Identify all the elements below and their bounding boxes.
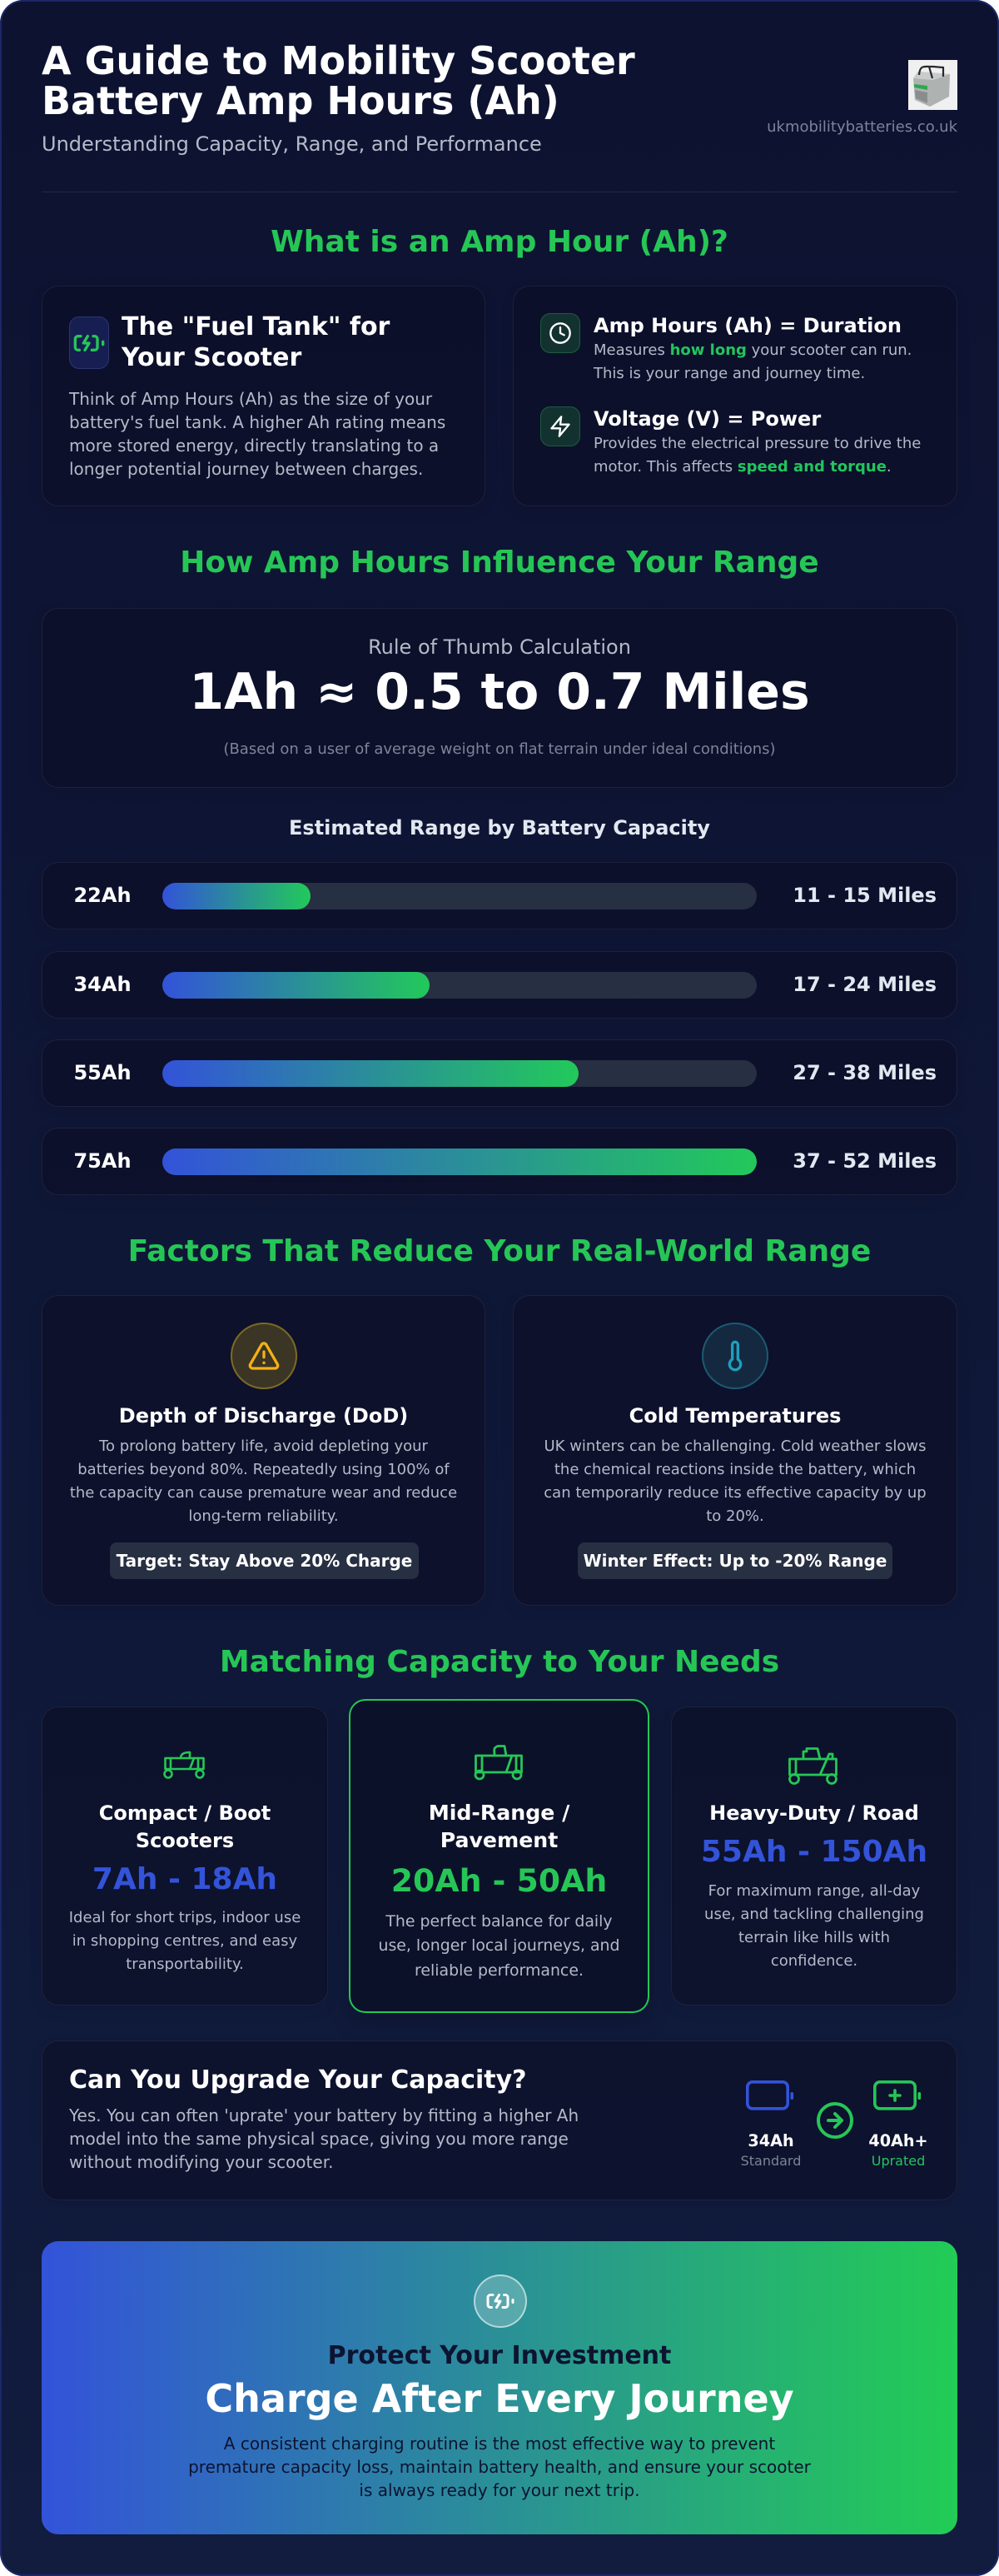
compact title: Scooters xyxy=(136,1829,234,1852)
fuel tank heading xyxy=(122,312,390,372)
rule value: 1Ah ≈ 0.5 to 0.7 Miles xyxy=(189,663,810,721)
panel: fuel tank xyxy=(42,286,485,506)
mid-range title: Pavement xyxy=(440,1828,558,1852)
upgrade text: model into the same physical space, giving you more range xyxy=(69,2129,569,2149)
upgrade text: Yes. You can often 'uprate' your battery by fitting a higher Ah xyxy=(69,2105,579,2125)
uprated label: Uprated xyxy=(872,2153,925,2169)
fuel tank text: more stored energy, directly translating to a xyxy=(69,436,439,456)
dod heading: Depth of Discharge (DoD) xyxy=(119,1404,408,1428)
row: 22Ah xyxy=(42,862,957,929)
row: 75Ah: 37 - 52 Miles xyxy=(793,1149,937,1173)
row: 22Ah: 11 - 15 Miles xyxy=(793,884,937,907)
amp hours heading: Amp Hours (Ah) = Duration xyxy=(594,314,902,337)
dod text: the capacity can cause premature wear and reduce xyxy=(70,1484,457,1502)
rule label: Rule of Thumb Calculation xyxy=(368,635,631,659)
subtitle: Understanding Capacity, Range, and Performance xyxy=(42,132,542,156)
range chart xyxy=(42,816,957,1195)
icon: compact scooter xyxy=(163,1751,205,1779)
dod text: batteries beyond 80%. Repeatedly using 100% of xyxy=(77,1461,450,1478)
fuel tank text: longer potential journey between charges. xyxy=(69,459,423,479)
fuel tank text xyxy=(68,389,445,479)
row: 55Ah xyxy=(42,1039,957,1107)
dod text: To prolong battery life, avoid depleting your xyxy=(99,1437,428,1455)
uprated value: 40Ah+ xyxy=(868,2131,928,2150)
cta text: is always ready for your next trip. xyxy=(359,2480,640,2500)
compact range: 7Ah - 18Ah xyxy=(92,1862,277,1896)
heading: range influence: How Amp Hours Influence Your Range xyxy=(180,546,819,580)
cta headline: Charge After Every Journey xyxy=(205,2376,794,2421)
icon: uprated battery xyxy=(873,2080,921,2110)
title: Battery Amp Hours (Ah) xyxy=(42,78,559,123)
voltage text: motor. This affects speed and torque. xyxy=(594,458,892,476)
cold text: can temporarily reduce its effective capacity by up xyxy=(544,1484,927,1502)
panel: duration and power xyxy=(513,286,957,506)
fuel tank text: battery's fuel tank. A higher Ah rating means xyxy=(69,412,445,432)
icon: heavy-duty scooter xyxy=(788,1747,837,1785)
icon: mid-range scooter xyxy=(475,1745,523,1781)
title xyxy=(42,38,635,123)
cold text: to 20%. xyxy=(706,1507,764,1525)
row: 75Ah: 75Ah xyxy=(73,1149,132,1173)
row: 34Ah: 34Ah xyxy=(73,973,132,996)
heavy-duty text: use, and tackling challenging xyxy=(704,1906,924,1923)
upgrade text: without modifying your scooter. xyxy=(69,2152,333,2172)
row: 34Ah: 17 - 24 Miles xyxy=(793,973,937,996)
heavy-duty range: 55Ah - 150Ah xyxy=(701,1835,927,1869)
mid-range text xyxy=(378,1912,619,1980)
compact text: transportability. xyxy=(126,1956,244,1973)
heavy-duty text: For maximum range, all-day xyxy=(708,1882,920,1900)
heavy-duty text xyxy=(704,1882,924,1970)
panel: depth of discharge xyxy=(42,1295,485,1606)
icon: battery charging xyxy=(69,316,109,369)
row: 75Ah xyxy=(42,1128,957,1195)
logo image: battery xyxy=(908,60,957,110)
cta kicker: Protect Your Investment xyxy=(328,2341,671,2370)
voltage text: Provides the electrical pressure to drive the xyxy=(594,435,921,452)
fuel tank heading: The "Fuel Tank" for xyxy=(122,312,390,341)
upgrade heading: Can You Upgrade Your Capacity? xyxy=(69,2065,527,2095)
compact text: Ideal for short trips, indoor use xyxy=(69,1909,301,1926)
cold text xyxy=(544,1437,927,1525)
panel: call to action xyxy=(42,2241,957,2534)
icon: thermometer xyxy=(702,1323,768,1389)
panel: rule of thumb xyxy=(42,608,957,788)
title: A Guide to Mobility Scooter xyxy=(42,38,635,83)
fuel tank text: Think of Amp Hours (Ah) as the size of your xyxy=(69,389,432,409)
panel: compact scooters xyxy=(42,1707,328,2005)
header xyxy=(42,38,957,192)
icon: clock xyxy=(540,313,580,353)
heading: what is an amp hour: What is an Amp Hour (Ah)? xyxy=(271,225,728,259)
panel: mid-range scooters xyxy=(349,1699,649,2013)
mid-range text: reliable performance. xyxy=(415,1961,584,1980)
heading: matching capacity: Matching Capacity to Your Needs xyxy=(220,1645,779,1679)
panel: heavy-duty scooters xyxy=(671,1707,957,2005)
cold text: UK winters can be challenging. Cold weather slows xyxy=(544,1437,926,1455)
arrow xyxy=(817,2102,853,2139)
cold text: the chemical reactions inside the battery, which xyxy=(554,1461,916,1478)
winter effect tag: Winter Effect: Up to -20% Range xyxy=(584,1551,887,1571)
compact title: Compact / Boot xyxy=(99,1801,271,1825)
fuel tank heading: Your Scooter xyxy=(122,343,301,372)
mid-range text: use, longer local journeys, and xyxy=(378,1936,619,1955)
icon: standard battery xyxy=(746,2080,794,2110)
mid-range text: The perfect balance for daily xyxy=(385,1912,613,1931)
icon: warning xyxy=(231,1323,297,1389)
heavy-duty title: Heavy-Duty / Road xyxy=(709,1801,919,1825)
row: 34Ah xyxy=(42,951,957,1019)
dod text: long-term reliability. xyxy=(188,1507,339,1525)
upgrade text xyxy=(69,2105,579,2172)
row: 55Ah: 27 - 38 Miles xyxy=(793,1061,937,1084)
heavy-duty text: terrain like hills with xyxy=(738,1929,890,1946)
amp hours text: Measures how long your scooter can run. xyxy=(594,341,912,359)
cta text: A consistent charging routine is the most effective way to prevent xyxy=(224,2434,775,2454)
icon: charging circle xyxy=(474,2275,527,2328)
compact text xyxy=(69,1909,301,1973)
winter effect tag xyxy=(578,1542,892,1579)
icon: lightning xyxy=(540,406,580,446)
amp hours text xyxy=(593,341,912,382)
compact title xyxy=(99,1801,271,1852)
amp hours text: This is your range and journey time. xyxy=(594,365,865,382)
panel: upgrade capacity xyxy=(42,2040,957,2200)
row: 22Ah: 22Ah xyxy=(73,884,132,907)
rule note: (Based on a user of average weight on flat terrain under ideal conditions) xyxy=(223,740,776,758)
dod target tag xyxy=(110,1542,419,1579)
mid-range range: 20Ah - 50Ah xyxy=(391,1862,607,1899)
mid-range title: Mid-Range / xyxy=(429,1801,569,1825)
compact text: in shopping centres, and easy xyxy=(72,1932,297,1950)
dod text xyxy=(70,1437,457,1525)
standard value: 34Ah xyxy=(748,2131,794,2150)
standard label: Standard xyxy=(741,2153,801,2169)
website url: ukmobilitybatteries.co.uk xyxy=(767,118,957,136)
heading: factors: Factors That Reduce Your Real-World Range xyxy=(128,1234,871,1268)
cta text: premature capacity loss, maintain battery health, and ensure your scooter xyxy=(188,2457,811,2477)
dod target tag: Target: Stay Above 20% Charge xyxy=(117,1551,412,1571)
chart title: Estimated Range by Battery Capacity xyxy=(289,816,710,840)
row: 55Ah: 55Ah xyxy=(73,1061,132,1084)
mid-range title xyxy=(429,1801,569,1852)
panel: cold temperatures xyxy=(513,1295,957,1606)
cold heading: Cold Temperatures xyxy=(629,1404,841,1428)
voltage heading: Voltage (V) = Power xyxy=(594,407,821,431)
voltage text xyxy=(594,435,921,476)
cta text xyxy=(188,2434,811,2500)
heavy-duty text: confidence. xyxy=(771,1952,857,1970)
